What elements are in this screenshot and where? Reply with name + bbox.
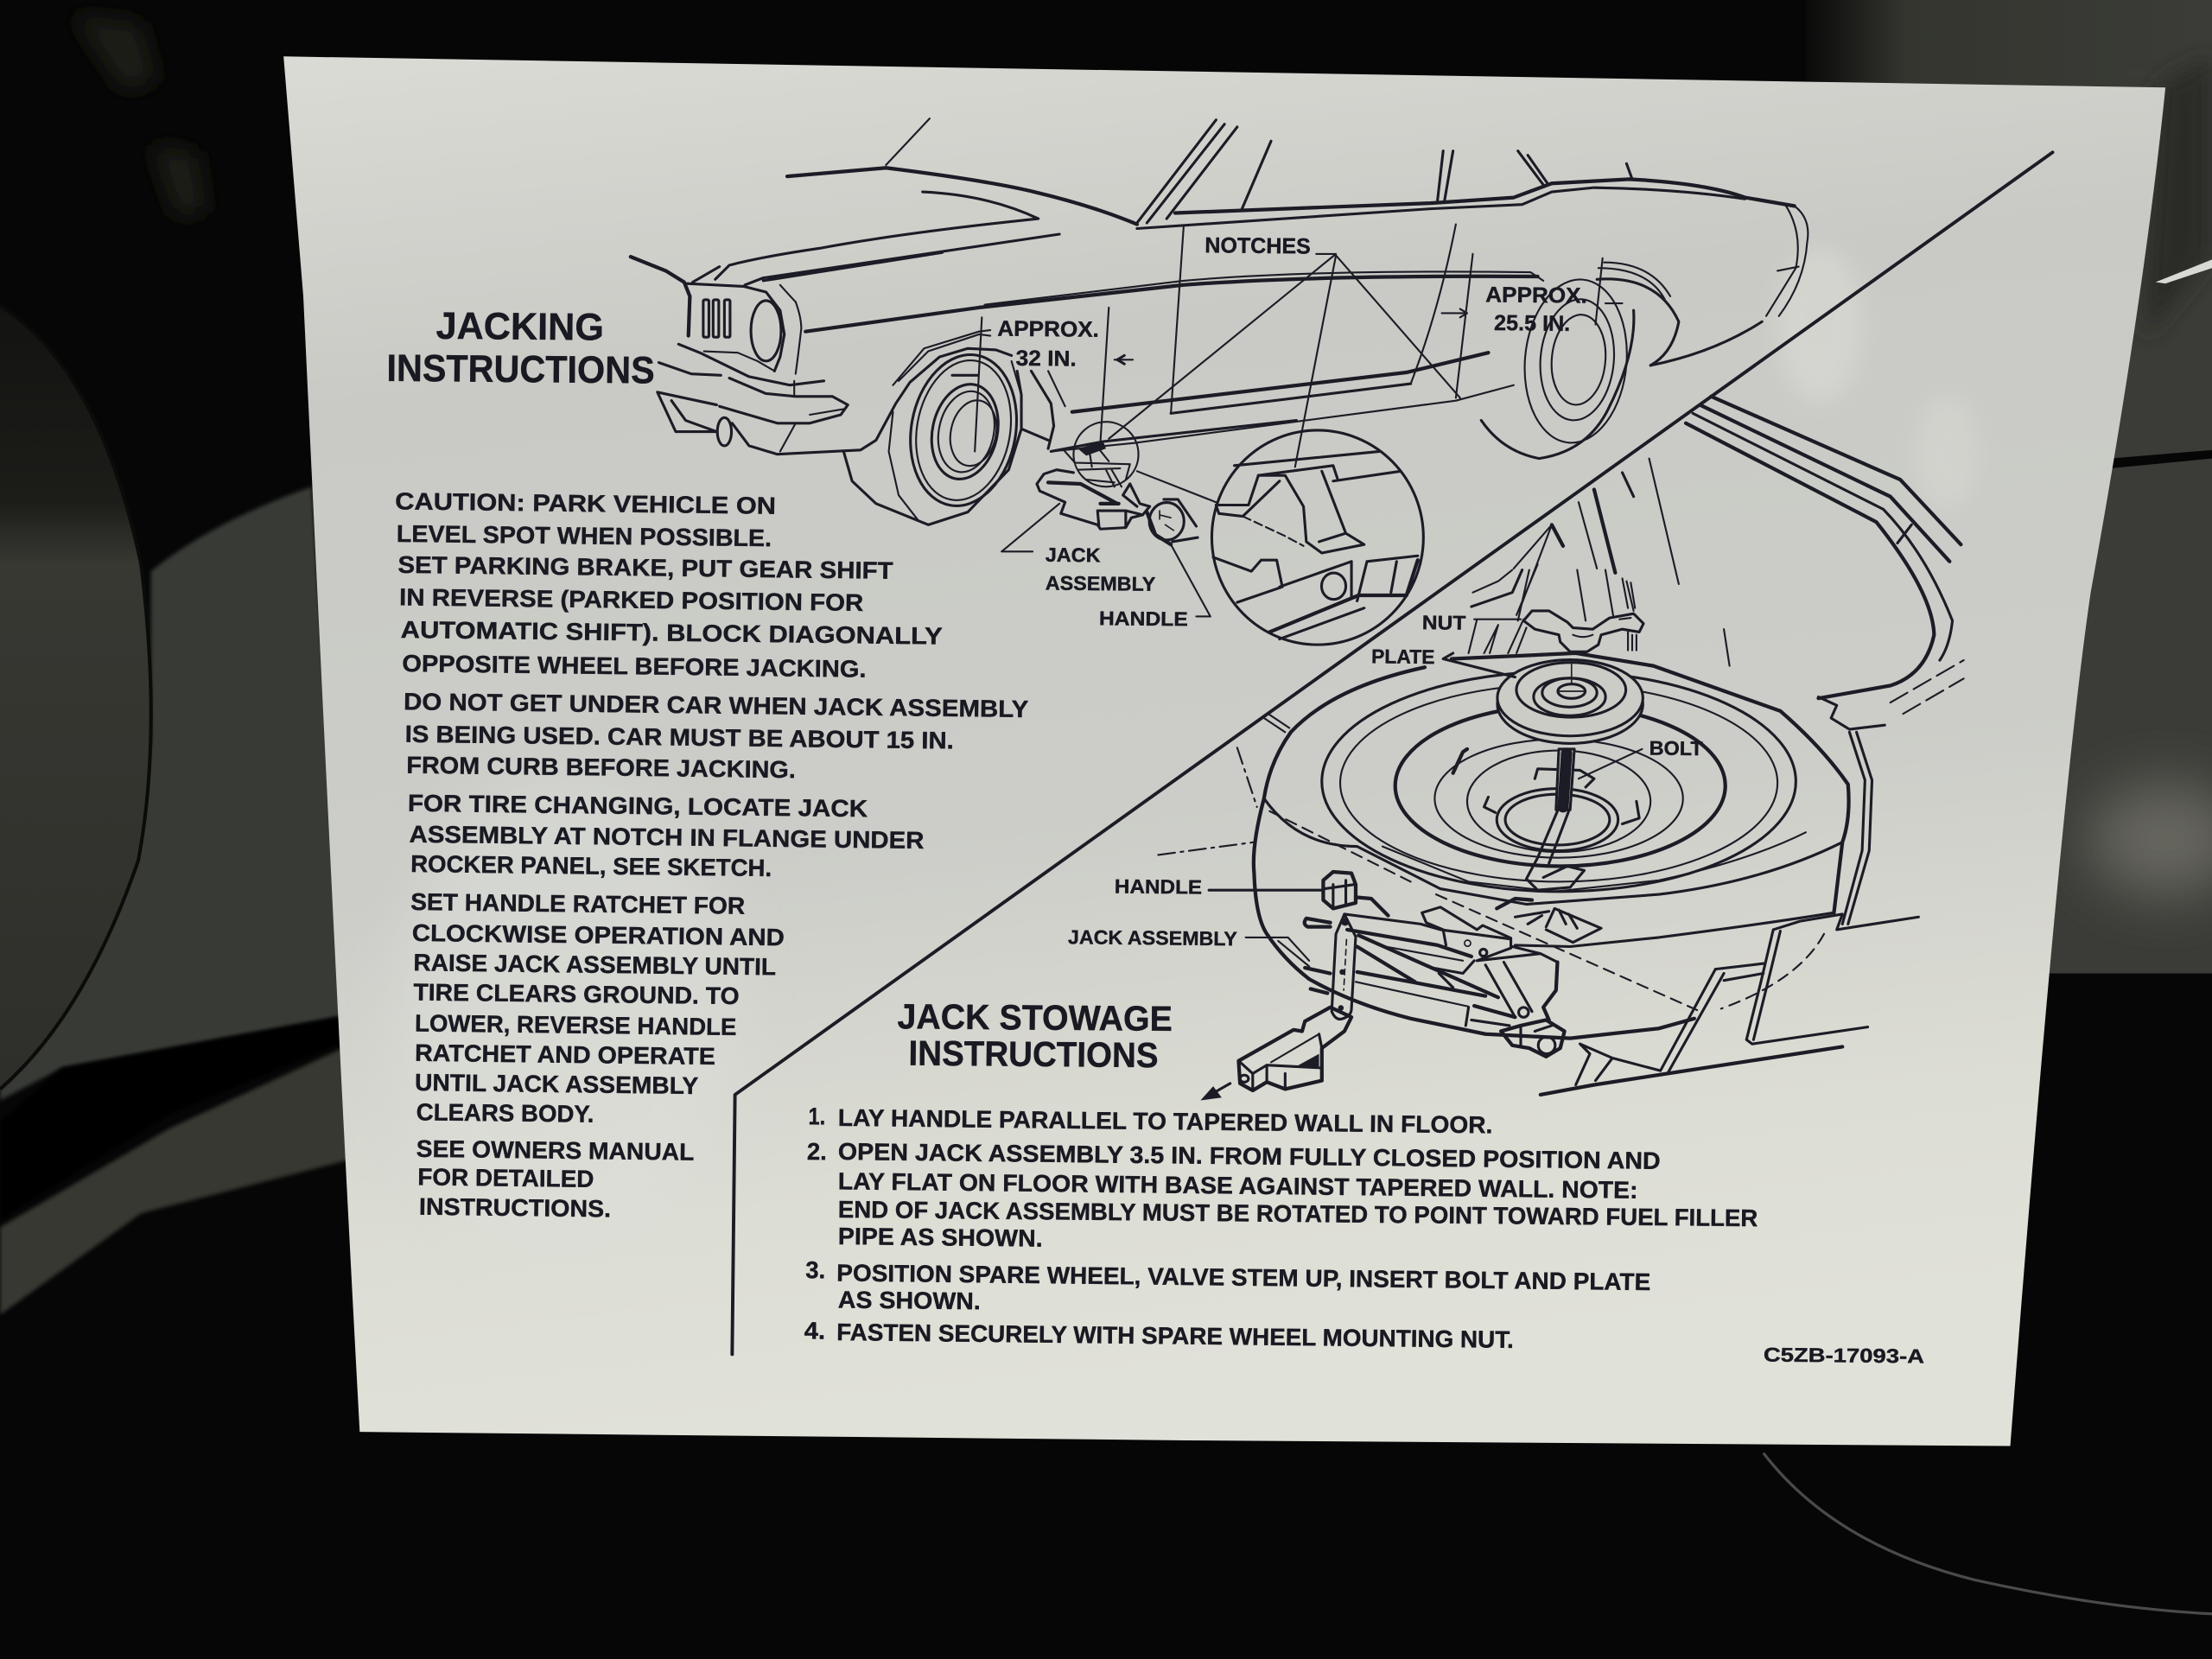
leader: jack assembly <box>1001 504 1059 551</box>
reflection: dark shadow on right <box>2145 56 2212 339</box>
icon: grille bars <box>703 300 730 337</box>
text block: jacking caution and procedure: SET HANDLE RATCHET FOR <box>410 888 745 919</box>
handle knob <box>1147 499 1198 544</box>
reflection: white streak <box>2156 259 2212 283</box>
valance <box>658 348 1012 454</box>
front wheel <box>843 346 1028 524</box>
fender stripes <box>1711 397 1961 544</box>
lower grille <box>678 344 823 385</box>
labels: car diagram: APPROX. <box>1485 283 1587 308</box>
bottom joint <box>1501 1020 1565 1057</box>
text block: jacking caution and procedure: FOR DETAILED <box>417 1163 594 1192</box>
text block: numbered stowage steps: 1. <box>808 1103 825 1129</box>
text block: numbered stowage steps: POSITION SPARE WHEEL, VALVE STEM UP, INSERT BOLT AND PLATE <box>836 1259 1650 1295</box>
text block: jacking caution and procedure: INSTRUCTIONS. <box>419 1193 611 1222</box>
lower right panel edge <box>1764 1453 2212 1614</box>
headlight <box>751 301 781 361</box>
labels: stowage diagram: JACK ASSEMBLY <box>1068 925 1237 950</box>
right panel seam <box>2110 450 2212 468</box>
reflection: right highlight <box>2088 783 2212 896</box>
roof and windshield lines <box>787 168 1137 225</box>
vertical bar <box>1332 914 1356 1020</box>
reflection: left band <box>0 486 346 1100</box>
labels: stowage diagram: HANDLE <box>1115 874 1202 899</box>
tire outer <box>1254 667 1694 1039</box>
labels: car diagram: 25.5 IN. <box>1494 311 1570 336</box>
reflection: lower band <box>0 1046 350 1315</box>
text block: numbered stowage steps: AS SHOWN. <box>838 1286 981 1314</box>
text block: jacking caution and procedure: IS BEING USED. CAR MUST BE ABOUT 15 IN. <box>404 721 954 754</box>
text block: jacking caution and procedure: TIRE CLEARS GROUND. TO <box>413 979 740 1009</box>
notch detail circle <box>1211 430 1423 645</box>
handle on tire <box>1497 899 1532 908</box>
text block: numbered stowage steps: 2. <box>807 1138 827 1165</box>
leaders <box>1579 749 1642 779</box>
heading: jacking instructions: JACKING <box>435 305 604 349</box>
text block: jacking caution and procedure: LEVEL SPOT WHEN POSSIBLE. <box>397 520 772 551</box>
text block: numbered stowage steps: 4. <box>804 1317 825 1344</box>
reflection: right side area <box>2031 71 2212 974</box>
diagram: car side view <box>631 118 1808 524</box>
heading: jacking instructions <box>386 305 655 392</box>
plate <box>1497 660 1643 743</box>
leader: stowage jack assembly <box>1246 938 1309 966</box>
body crease <box>805 276 1538 332</box>
rear wheel arch <box>1597 279 1679 365</box>
reflection: dark streak <box>0 1016 346 1220</box>
heading: jacking instructions: INSTRUCTIONS <box>386 347 655 392</box>
scissor arms <box>1357 935 1498 997</box>
text block: jacking caution and procedure: ASSEMBLY AT NOTCH IN FLANGE UNDER <box>409 821 925 854</box>
jack ratchet mechanism <box>1064 448 1130 486</box>
text block: jacking caution and procedure: SEE OWNERS MANUAL <box>416 1135 695 1166</box>
stowed jack foot <box>1238 1007 1351 1090</box>
text block: numbered stowage steps <box>804 1103 1758 1353</box>
belt line <box>1175 179 1795 213</box>
text block: jacking caution and procedure: FROM CURB BEFORE JACKING. <box>406 752 796 783</box>
windshield pillars <box>1137 120 1271 223</box>
tire sidewall front <box>1264 798 1842 905</box>
text block: jacking caution and procedure: LOWER, REVERSE HANDLE <box>415 1009 737 1040</box>
filler pipe <box>1842 732 1872 924</box>
reflection: top strip on right <box>1806 0 2212 87</box>
text block: jacking caution and procedure: AUTOMATIC SHIFT). BLOCK DIAGONALLY <box>401 616 943 650</box>
whitewall rings <box>1322 671 1796 892</box>
bumper <box>658 363 848 423</box>
notches leaders <box>1109 254 1460 467</box>
bolt <box>1556 749 1574 810</box>
labels: car diagram: 32 IN. <box>1015 346 1077 372</box>
text block: jacking caution and procedure: CLEARS BODY. <box>416 1098 594 1128</box>
text block: jacking caution and procedure: DO NOT GET UNDER CAR WHEN JACK ASSEMBLY <box>404 688 1029 722</box>
labels: car diagram: JACK <box>1046 543 1101 566</box>
lug handle through tire <box>1527 811 1584 890</box>
measuring lines and arrows <box>975 308 1133 451</box>
section divider: diagonal rule <box>732 152 2053 1354</box>
panel edge <box>0 306 151 1089</box>
text block: numbered stowage steps: LAY FLAT ON FLOOR WITH BASE AGAINST TAPERED WALL. NOTE: <box>838 1167 1638 1204</box>
heading: jack stowage instructions: INSTRUCTIONS <box>908 1033 1159 1075</box>
labels: stowage diagram: BOLT <box>1649 736 1703 760</box>
dashed fender edges <box>1891 660 1964 714</box>
text block: numbered stowage steps: FASTEN SECURELY WITH SPARE WHEEL MOUNTING NUT. <box>836 1319 1514 1353</box>
text block: jacking caution and procedure: IN REVERSE (PARKED POSITION FOR <box>399 583 863 616</box>
text block: jacking caution and procedure: FOR TIRE CHANGING, LOCATE JACK <box>408 790 868 822</box>
labels: stowage diagram: NUT <box>1422 611 1466 634</box>
text block: jacking caution and procedure: RAISE JACK ASSEMBLY UNTIL <box>413 949 776 980</box>
sill line and leaders <box>1051 421 1296 451</box>
text block: jacking caution and procedure: RATCHET AND OPERATE <box>415 1039 715 1070</box>
drop centre <box>1467 751 1650 852</box>
labels: car diagram: NOTCHES <box>1205 233 1311 259</box>
arrow toward fuel pipe <box>1200 1084 1230 1100</box>
fender <box>780 285 801 374</box>
heading: jack stowage instructions <box>897 996 1173 1075</box>
top plate <box>1422 907 1511 948</box>
floor step <box>1746 914 1918 1044</box>
locking pin <box>1305 918 1331 927</box>
jack body <box>1037 470 1150 529</box>
paper crease highlights <box>395 247 1978 1255</box>
rocker trim <box>1072 353 1488 412</box>
rim <box>1395 705 1726 866</box>
leader: handle <box>1171 544 1211 616</box>
cylinder <box>1474 1006 1515 1017</box>
rear end <box>1766 206 1808 316</box>
text block: numbered stowage steps: PIPE AS SHOWN. <box>838 1223 1043 1252</box>
small double tick <box>1264 714 1289 732</box>
front wheel arch <box>893 330 990 385</box>
text block: numbered stowage steps: END OF JACK ASSEMBLY MUST BE ROTATED TO POINT TOWARD FUEL FILLER <box>838 1196 1758 1231</box>
antenna line <box>886 118 930 165</box>
jack handle <box>1137 471 1216 502</box>
part number: C5ZB-17093-A <box>1764 1344 1924 1367</box>
text block: numbered stowage steps: 3. <box>805 1256 825 1283</box>
notch detail interior <box>1235 451 1401 481</box>
hood <box>715 192 1039 279</box>
labels: stowage diagram <box>1068 611 1703 950</box>
round access panel on left <box>0 306 151 1089</box>
icon: valve stem <box>1453 749 1467 773</box>
labels: stowage diagram: PLATE <box>1371 645 1435 668</box>
text block: jacking caution and procedure <box>395 487 1029 1222</box>
door outline <box>1171 384 1411 413</box>
panel: paper instruction sticker <box>283 56 2165 1446</box>
text block: jacking caution and procedure: SET PARKING BRAKE, PUT GEAR SHIFT <box>397 551 893 584</box>
labels: car diagram <box>997 233 1587 630</box>
labels: car diagram: APPROX. <box>997 317 1099 342</box>
text block: jacking caution and procedure: CAUTION: PARK VEHICLE ON <box>395 487 776 519</box>
jack location circle <box>1073 422 1139 486</box>
labels: car diagram: ASSEMBLY <box>1046 571 1155 595</box>
diagram: jack under car <box>1001 421 1423 645</box>
rear measuring lines <box>1442 254 1623 397</box>
heading: jack stowage instructions: JACK STOWAGE <box>897 996 1173 1039</box>
text block: jacking caution and procedure: OPPOSITE WHEEL BEFORE JACKING. <box>402 650 867 683</box>
dashed guides <box>1269 811 1824 1010</box>
side blobs <box>1305 968 1331 993</box>
text block: numbered stowage steps: OPEN JACK ASSEMBLY 3.5 IN. FROM FULLY CLOSED POSITION AND <box>838 1138 1661 1174</box>
diagram: spare tire stowage <box>1158 397 1964 1100</box>
door pillars <box>1438 151 1632 200</box>
reflection: upper left glimmer <box>71 14 207 217</box>
stowed jack frame <box>1305 907 1565 1057</box>
strokes above tire <box>1552 490 1615 573</box>
right bracket <box>1477 947 1557 962</box>
text block: jacking caution and procedure: CLOCKWISE OPERATION AND <box>412 919 785 950</box>
labels: car diagram: HANDLE <box>1099 607 1188 630</box>
stowed jack handle head <box>1209 872 1389 916</box>
text block: numbered stowage steps: LAY HANDLE PARALLEL TO TAPERED WALL IN FLOOR. <box>838 1104 1493 1138</box>
pivot link <box>1485 962 1532 1017</box>
rear wheel <box>1481 276 1634 459</box>
nose <box>631 257 690 336</box>
wing nut <box>1523 611 1643 652</box>
text block: jacking caution and procedure: ROCKER PANEL, SEE SKETCH. <box>410 850 772 881</box>
fuel filler tab <box>1818 697 1885 729</box>
top arm <box>1344 914 1510 939</box>
text block: jacking caution and procedure: UNTIL JACK ASSEMBLY <box>415 1069 699 1099</box>
